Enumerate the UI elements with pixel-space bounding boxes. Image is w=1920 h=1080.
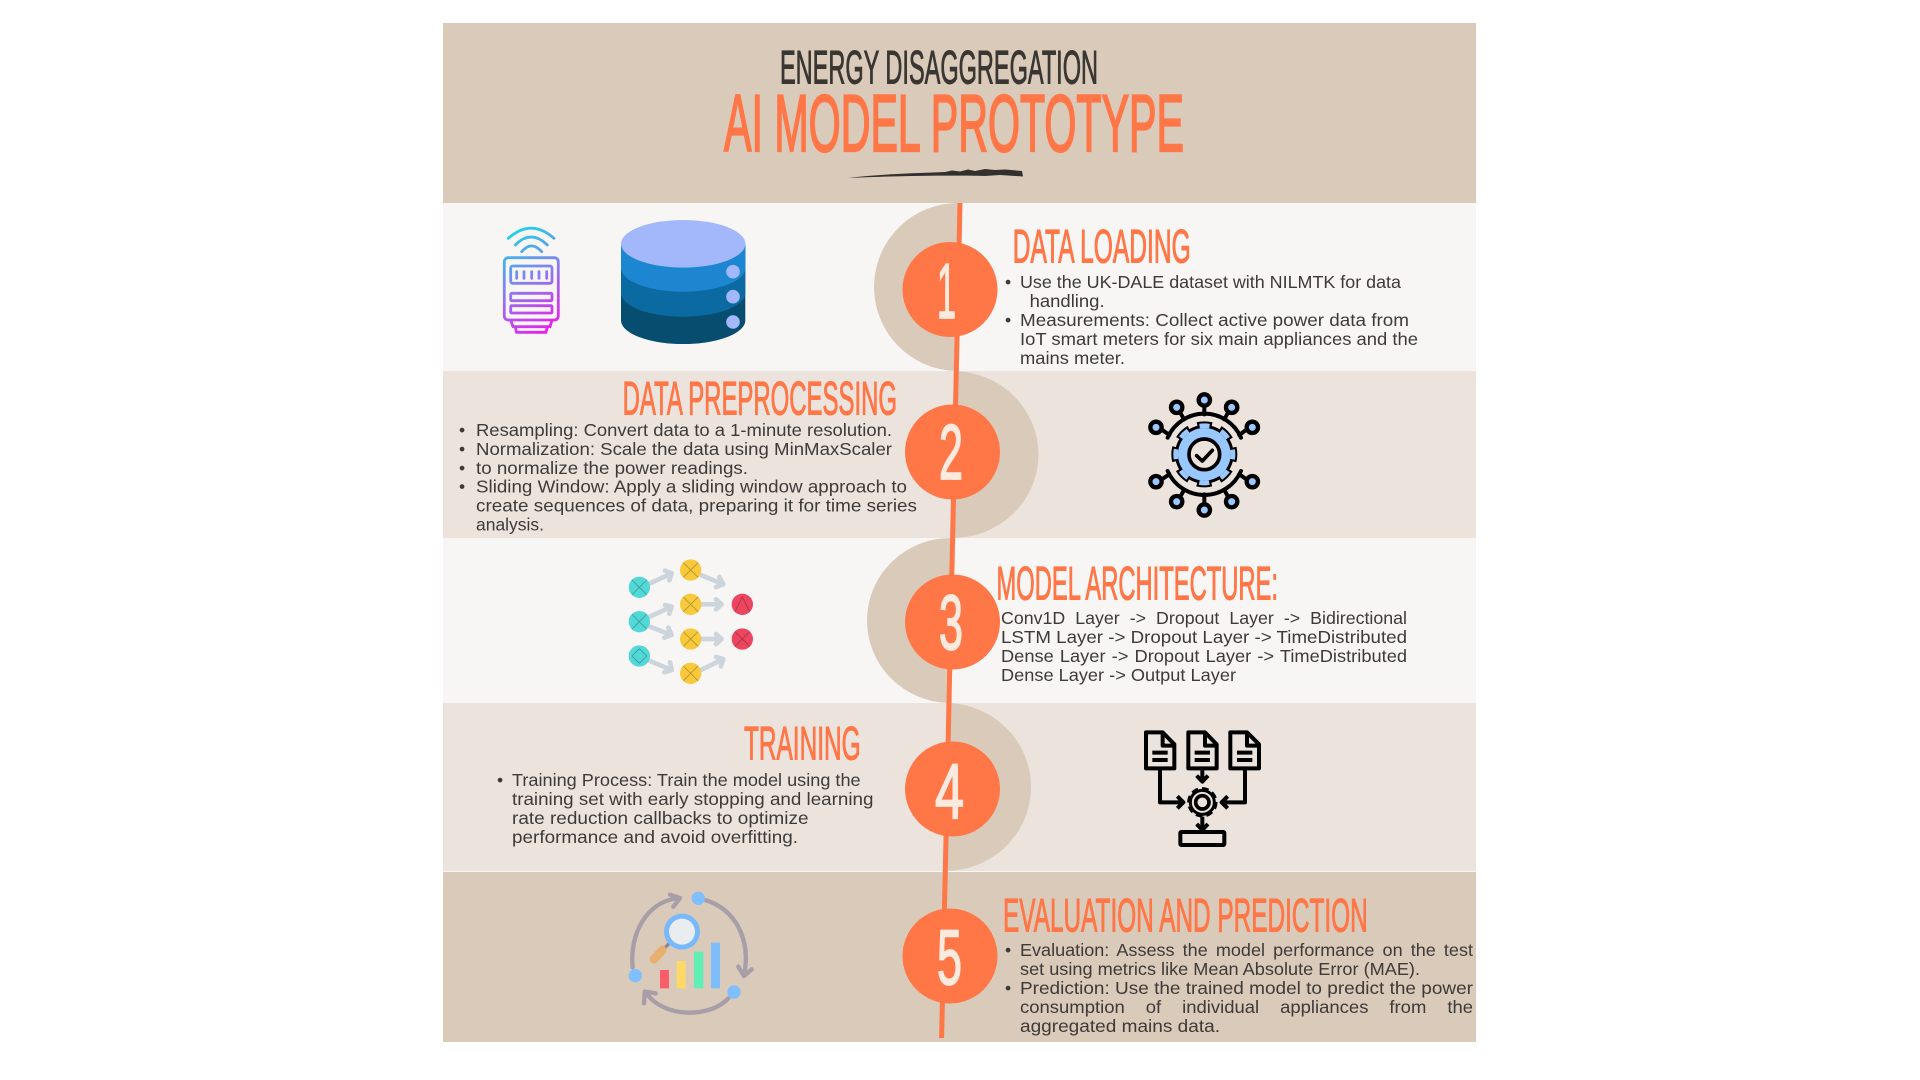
text block: data loading: •	[1005, 272, 1011, 292]
step 2 number: 2	[939, 408, 963, 496]
icon: analytics cycle	[629, 892, 752, 1013]
text block: evaluation and prediction: •	[1005, 978, 1011, 998]
text block: data preprocessing: •	[459, 439, 465, 459]
timeline line	[942, 203, 960, 1038]
text block: training: •	[497, 770, 503, 790]
text block: data loading: Measurements: Collect active power data from	[1020, 310, 1409, 330]
panel: row backgrounds	[443, 203, 1476, 1042]
text block: data preprocessing: analysis.	[476, 514, 544, 534]
step 4 number: 4	[935, 747, 964, 835]
text block: evaluation and prediction: consumption of individual appliances from the	[1020, 997, 1473, 1017]
icon: documents pipeline	[1146, 732, 1259, 845]
text block: data loading: •	[1005, 310, 1011, 330]
heading: data loading: DATA LOADING	[1013, 220, 1191, 272]
text block: training: training set with early stopping and learning	[512, 789, 873, 809]
text block: data preprocessing: create sequences of data, preparing it for time series	[476, 496, 917, 516]
text block: model architecture: Conv1D Layer -> Dropout Layer -> Bidirectional	[1001, 608, 1407, 628]
heading: model architecture: MODEL ARCHITECTURE:	[996, 556, 1278, 610]
text block: data preprocessing: to normalize the power readings.	[476, 458, 748, 478]
text block: training: rate reduction callbacks to optimize	[512, 808, 808, 828]
text block: evaluation and prediction: aggregated mains data.	[1020, 1016, 1220, 1036]
icon: gear network	[1150, 394, 1258, 516]
title: energy disaggregation: ENERGY DISAGGREGATION	[780, 40, 1098, 94]
text block: evaluation and prediction: Evaluation: Assess the model performance on the test	[1020, 940, 1473, 960]
text block: training: performance and avoid overfitting.	[512, 827, 798, 847]
text block: data loading: mains meter.	[1020, 348, 1125, 368]
step 5 number: 5	[937, 913, 962, 1001]
text block: evaluation and prediction: set using metrics like Mean Absolute Error (MAE).	[1020, 959, 1420, 979]
text block: data preprocessing: •	[459, 420, 465, 440]
tan bulges behind timeline	[867, 203, 1038, 871]
text block: data preprocessing: Sliding Window: Apply a sliding window approach to	[476, 476, 907, 496]
icon: neural network	[629, 559, 753, 684]
text block: data preprocessing	[459, 420, 917, 534]
step 5 number	[902, 908, 998, 1004]
text block: evaluation and prediction: •	[1005, 940, 1011, 960]
text block: data preprocessing: •	[459, 458, 465, 478]
text block: evaluation and prediction: Prediction: Use the trained model to predict the power	[1020, 978, 1473, 998]
text block: data loading: handling.	[1030, 291, 1105, 311]
header panel	[443, 23, 1476, 203]
step 3 number	[905, 574, 1000, 670]
step 1 number	[902, 242, 998, 337]
text block: model architecture	[1001, 608, 1407, 685]
step 3 number: 3	[939, 578, 963, 666]
text block: model architecture: Dense Layer -> Output Layer	[1001, 665, 1236, 685]
text block: model architecture: LSTM Layer -> Dropout Layer -> TimeDistributed	[1001, 627, 1407, 647]
step 1 number: 1	[937, 247, 956, 335]
text block: data preprocessing: Resampling: Convert data to a 1-minute resolution.	[476, 420, 892, 440]
text block: training	[497, 770, 873, 847]
brush underline	[848, 169, 1023, 178]
step 2 number	[905, 404, 1000, 500]
text block: data loading: Use the UK-DALE dataset with NILMTK for data	[1020, 272, 1401, 292]
text block: data loading	[1005, 272, 1418, 368]
text block: data loading: IoT smart meters for six main appliances and the	[1020, 329, 1418, 349]
text block: data preprocessing: Normalization: Scale the data using MinMaxScaler	[476, 439, 892, 459]
title: AI model prototype: AI MODEL PROTOTYPE	[724, 79, 1184, 169]
heading: evaluation and prediction: EVALUATION AND PREDICTION	[1003, 888, 1368, 942]
text block: training: Training Process: Train the model using the	[512, 770, 861, 790]
heading: training: TRAINING	[744, 716, 861, 770]
step 4 number	[905, 742, 1000, 836]
icon: smart meter	[504, 228, 558, 332]
text block: data preprocessing: •	[459, 476, 465, 496]
heading: data preprocessing: DATA PREPROCESSING	[623, 372, 897, 424]
text block: evaluation and prediction	[1005, 940, 1473, 1036]
icon: database	[621, 220, 745, 344]
text block: model architecture: Dense Layer -> Dropout Layer -> TimeDistributed	[1001, 646, 1407, 666]
